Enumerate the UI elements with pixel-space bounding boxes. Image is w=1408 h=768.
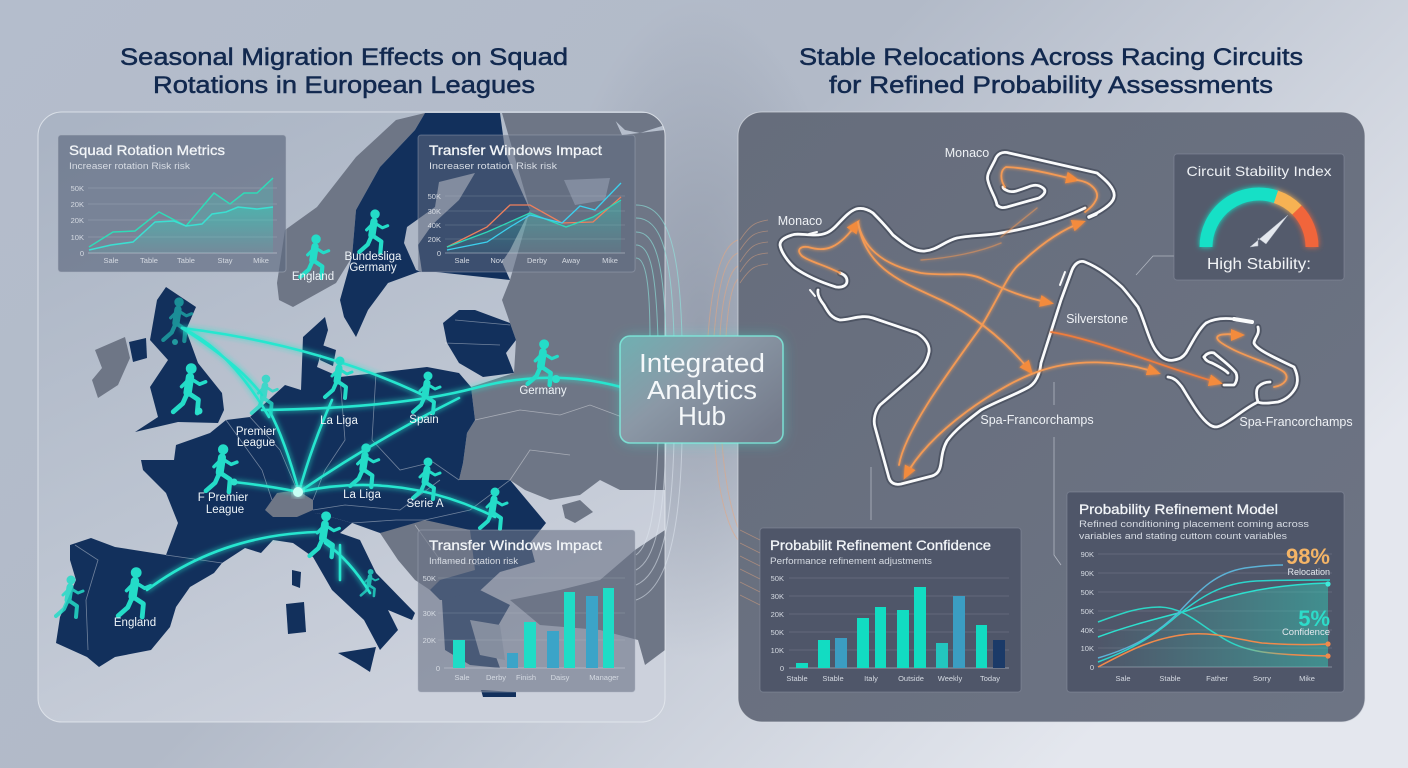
chart panel: Probability Refinement Model: 90K	[1081, 550, 1094, 559]
chart panel: Probability Refinement Confidence: Weekly	[938, 674, 962, 683]
chart panel: Transfer Windows Impact (lines): 30K	[428, 207, 441, 216]
chart panel: Transfer Windows Impact (bars): Sale	[454, 673, 470, 682]
integrated analytics hub: Hub	[678, 403, 726, 431]
player: England	[173, 364, 206, 413]
player: Poland	[413, 372, 440, 413]
chart panel: Probability Refinement Confidence	[760, 528, 1021, 692]
chart panel: Transfer Windows Impact (bars): 20K	[423, 636, 436, 645]
chart panel: Squad Rotation Metrics: 20K	[71, 200, 84, 209]
chart panel: Probability Refinement Model: Stable	[1159, 674, 1181, 683]
faded arcs inside panel	[740, 220, 768, 605]
track white line	[780, 152, 1297, 484]
race tracks	[780, 152, 1297, 484]
chart panel: Probability Refinement Confidence: Stable	[822, 674, 844, 683]
gauge arc	[1206, 194, 1312, 247]
map labels: England	[292, 271, 334, 283]
chart panel: Squad Rotation Metrics	[58, 135, 286, 272]
chart panel: Squad Rotation Metrics: Squad Rotation Metrics	[69, 142, 225, 158]
gray eastern lands	[92, 113, 665, 665]
chart panel: Transfer Windows Impact (bars): 0	[436, 664, 440, 673]
track labels	[778, 146, 1353, 429]
chart panel: Probability Refinement Model: variables and stating cuttom count variables	[1079, 531, 1288, 541]
chart panel: Probability Refinement Confidence: 50K	[771, 628, 784, 637]
chart panel: Transfer Windows Impact (bars): Finish	[516, 673, 536, 682]
gauge needle	[1250, 215, 1288, 247]
map labels: F Premier	[198, 492, 248, 504]
chart panel: Squad Rotation Metrics: 0	[80, 249, 84, 258]
chart panel: Transfer Windows Impact (lines): Transfer Windows Impact	[429, 142, 602, 158]
map labels: Germany	[519, 385, 567, 397]
chart panel: Probability Refinement Confidence: 0	[780, 664, 784, 673]
map of Europe	[56, 113, 665, 697]
navy lands	[56, 113, 546, 697]
chart panel: Probability Refinement Confidence: Probabilit Refinement Confidence	[770, 537, 991, 553]
title: right line two: for Refined Probability Assessments	[829, 72, 1273, 99]
chart panel: Transfer Windows Impact (lines): Nov	[490, 256, 504, 265]
map labels: Germany	[349, 262, 397, 274]
chart panel: Transfer Windows Impact (lines): Derby	[527, 256, 547, 265]
stat: 5% confidence	[1282, 606, 1330, 638]
panel: racing circuits	[738, 112, 1365, 722]
chart panel: Probability Refinement Model: 50K	[1081, 588, 1094, 597]
chart panel: Transfer Windows Impact (lines): Mike	[602, 256, 618, 265]
stat: 5% confidence: 5%	[1298, 606, 1330, 631]
chart panel: Transfer Windows Impact (lines): Sale	[454, 256, 470, 265]
chart panel: Squad Rotation Metrics: Table	[140, 256, 158, 265]
chart panel: Transfer Windows Impact (lines): 40K	[428, 221, 441, 230]
player: Sweden	[359, 210, 388, 253]
player: Germany south	[350, 444, 379, 487]
chart panel: Transfer Windows Impact (bars): 50K	[423, 574, 436, 583]
chart panel: Probability Refinement Model: 50K	[1081, 607, 1094, 616]
connection arcs: hub to lower left	[636, 440, 682, 600]
title: left line two: Rotations in European Leagues	[153, 72, 535, 99]
player: Spain	[118, 568, 151, 617]
chart panel: Squad Rotation Metrics: Mike	[253, 256, 269, 265]
chart panel: Squad Rotation Metrics: Sale	[103, 256, 119, 265]
chart panel: Transfer Windows Impact (bars): Derby	[486, 673, 506, 682]
chart panel: Squad Rotation Metrics: 50K	[71, 184, 84, 193]
chart panel: Probability Refinement Confidence: Outside	[898, 674, 924, 683]
chart panel: Transfer Windows Impact (lines): 0	[437, 249, 441, 258]
chart panel: Transfer Windows Impact (lines)	[418, 135, 635, 272]
chart panel: Probability Refinement Model: Probability Refinement Model	[1079, 501, 1278, 517]
player: Germany west	[325, 357, 352, 398]
gray Switzerland and Adriatic coast	[265, 490, 475, 590]
track labels: Monaco	[778, 214, 822, 228]
map labels: League	[206, 504, 244, 516]
chart panel: Probability Refinement Model: Refined conditioning placement coming across	[1079, 519, 1310, 529]
gauge panel: Circuit Stability Index: High Stability:	[1207, 256, 1311, 273]
map labels: League	[237, 437, 275, 449]
connection arcs: right panel to hub	[708, 240, 738, 540]
track shadow	[780, 152, 1297, 484]
track labels: Spa-Francorchamps	[1239, 415, 1353, 429]
player: Italy	[310, 512, 339, 557]
map labels: La Liga	[320, 415, 358, 427]
chart panel: Probability Refinement Model: Father	[1206, 674, 1228, 683]
chart panel: Transfer Windows Impact (bars)	[418, 530, 635, 692]
chart panel: Probability Refinement Model: Sorry	[1253, 674, 1271, 683]
chart panel: Transfer Windows Impact (bars): Inflamed rotation risk	[429, 556, 519, 566]
player: Low Countries	[252, 375, 277, 414]
chart panel: Probability Refinement Confidence: Italy	[864, 674, 878, 683]
chart panel: Squad Rotation Metrics: 20K	[71, 216, 84, 225]
chart panel: Transfer Windows Impact (lines): 20K	[428, 235, 441, 244]
map labels: La Liga	[343, 489, 381, 501]
chart panel: Squad Rotation Metrics: Increaser rotation Risk risk	[69, 161, 191, 171]
player: Portugal	[56, 576, 83, 617]
chart panel: Squad Rotation Metrics: Table	[177, 256, 195, 265]
chart panel: Probability Refinement Model: 40K	[1081, 626, 1094, 635]
chart panel: Transfer Windows Impact (lines): Away	[562, 256, 580, 265]
title: right: Stable Relocations Across Racing Circuits	[799, 44, 1303, 71]
player: Romania	[480, 488, 507, 529]
migration routes	[147, 328, 621, 593]
chart panel: Probability Refinement Confidence: 10K	[771, 646, 784, 655]
chart panel: Probability Refinement Model: Mike	[1299, 674, 1315, 683]
chart panel: Transfer Windows Impact (bars): Transfer Windows Impact	[429, 537, 602, 553]
title: left: Seasonal Migration Effects on Squad	[120, 44, 568, 71]
map labels: Bundesliga	[345, 251, 402, 263]
player: Austria	[413, 458, 440, 499]
chart panel: Squad Rotation Metrics: 10K	[71, 233, 84, 242]
league players	[56, 210, 557, 617]
integrated analytics hub	[620, 336, 783, 443]
chart panel: Probability Refinement Model: 0	[1090, 663, 1094, 672]
track labels: Spa-Francorchamps	[980, 413, 1094, 427]
map labels: Serie A	[406, 498, 444, 510]
map labels: Spain	[409, 414, 439, 426]
water inlets	[404, 173, 610, 660]
country borders	[75, 320, 630, 650]
player: Norway	[300, 235, 329, 278]
gauge panel: Circuit Stability Index	[1174, 154, 1344, 280]
hub node	[293, 487, 303, 497]
integrated analytics hub: Integrated	[639, 350, 765, 378]
player: France	[206, 445, 237, 492]
chart panel: Probability Refinement Confidence: 30K	[771, 592, 784, 601]
player: Scotland	[163, 298, 192, 341]
track labels: Monaco	[945, 146, 989, 160]
chart panel: Probability Refinement Model: 90K	[1081, 569, 1094, 578]
chart panel: Probability Refinement Model: 10K	[1081, 644, 1094, 653]
chart panel: Probability Refinement Confidence: Performance refinement adjustments	[770, 556, 933, 566]
chart panel: Probability Refinement Confidence: Today	[980, 674, 1000, 683]
balls	[172, 339, 560, 486]
chart panel: Transfer Windows Impact (bars): Daisy	[551, 673, 570, 682]
map labels: Premier	[236, 426, 276, 438]
chart panel: Probability Refinement Confidence: Stable	[786, 674, 808, 683]
chart panel: Transfer Windows Impact (lines): 50K	[428, 192, 441, 201]
player: southern Italy	[361, 569, 378, 596]
chart panel: Probability Refinement Model	[1067, 492, 1344, 692]
stat: 98% relocation: Relocation	[1287, 567, 1330, 577]
chart panel: Transfer Windows Impact (bars): Manager	[589, 673, 619, 682]
gauge panel: Circuit Stability Index: Circuit Stability Index	[1186, 163, 1332, 179]
chart panel: Probability Refinement Confidence: 20K	[771, 610, 784, 619]
chart panel: Transfer Windows Impact (lines): Increaser rotation Risk risk	[429, 161, 558, 171]
stat: 98% relocation: 98%	[1286, 544, 1330, 569]
map labels	[114, 251, 567, 629]
leader lines	[871, 256, 1174, 565]
panel: European leagues map	[38, 112, 665, 722]
chart panel: Probability Refinement Confidence: 50K	[771, 574, 784, 583]
player: east	[528, 340, 557, 385]
track labels: Silverstone	[1066, 312, 1128, 326]
chart panel: Squad Rotation Metrics: Stay	[217, 256, 233, 265]
connection arcs: left to hub	[636, 205, 682, 340]
map labels: England	[114, 617, 156, 629]
chart panel: Probability Refinement Model: Sale	[1115, 674, 1131, 683]
integrated analytics hub: Analytics	[647, 377, 757, 405]
relocation arrows	[799, 167, 1287, 477]
chart panel: Transfer Windows Impact (bars): 30K	[423, 609, 436, 618]
stat: 5% confidence: Confidence	[1282, 627, 1330, 638]
